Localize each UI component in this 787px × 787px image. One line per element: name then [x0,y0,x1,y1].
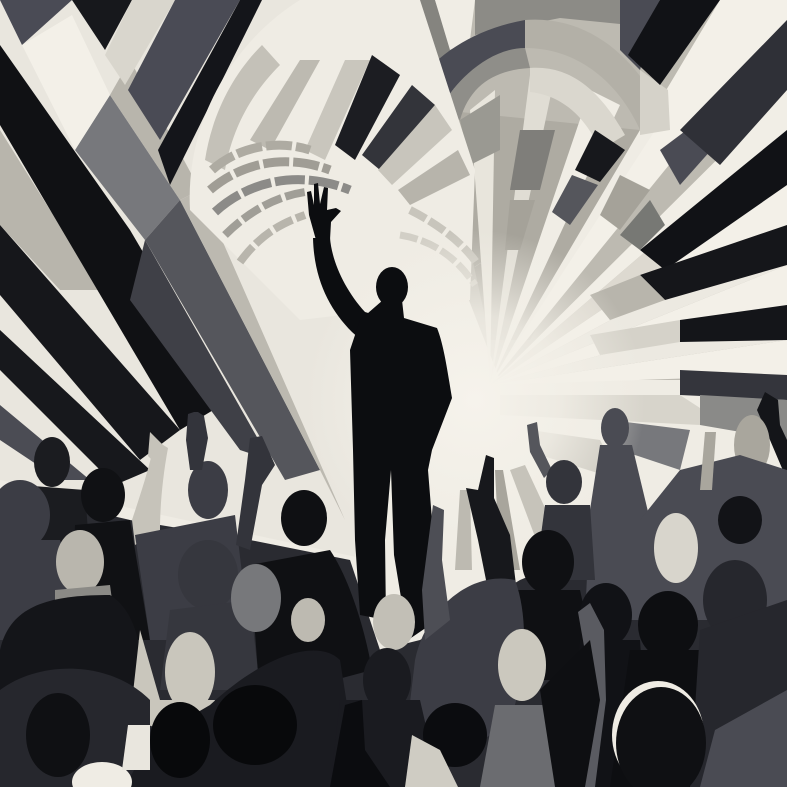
person: dark head right [718,496,762,544]
person: cream head lower centre [480,629,575,787]
person: far left head [0,437,90,560]
person: head dark right 2 [610,591,730,787]
speaker: head [376,267,408,307]
person: second from left [70,468,150,640]
crowd base left [0,470,787,787]
person: centre lower blue-grey mass [400,578,524,787]
person: grey shoulder lower right [700,690,787,787]
person: left dark figure [0,480,90,640]
person: hooded centre left [135,461,250,640]
hand and arm: raised centre [236,436,275,550]
person: right edge figures [690,560,787,787]
person: black oval head [213,685,297,765]
hand and arm: small raised right [527,422,552,478]
person: cream head [130,630,215,740]
person: dark centre head [330,648,440,787]
panel: right lower rays [500,370,787,480]
person: white hair head lower right [612,681,706,787]
speaker: raised arm [313,238,385,350]
person: cream bottom centre [405,735,458,787]
person: foreground centre dark shoulders [125,650,360,787]
hand: raised left [148,432,166,466]
person: pale head centre [291,598,325,642]
person: black dark lower centre [423,703,487,767]
panel: upper-right dome ring [345,0,787,355]
person: large dark shoulder left [0,595,141,720]
panel: upper-right fan base [370,0,787,385]
person: tall hooded figure [585,408,650,620]
person: centre head and shoulders [250,490,372,700]
arm: small grey raised near speaker [422,505,450,640]
person: grey head centre [231,564,281,632]
panel: crowd right [330,392,787,787]
person: foreground head left [26,693,90,777]
person: mid-grey head [160,540,260,690]
hand and arm: large raised centre [466,455,516,600]
glow behind speaker [300,225,650,575]
person: pale head right [654,513,698,583]
person: head dark right [570,583,650,787]
person: pale head left [55,530,112,600]
person: foreground head dark [150,702,210,778]
strip: cream bottom-left [122,725,150,770]
person: foreground dark mass left [0,669,150,787]
panel: lower centre rays [455,465,560,570]
speaker: torso and legs [350,300,452,640]
person: head beside hooded figure [535,460,595,580]
person: pale head far right [734,415,770,475]
person: black bottom centre [330,700,390,787]
hand: raised dark left [186,412,208,470]
figure: speaker silhouette [307,183,452,640]
panel: upper-left diagonal bands [0,0,370,560]
arm: grey raised [700,432,716,490]
person: pale head near speaker [373,594,415,650]
panel: crowd left [0,412,787,787]
hand and arm: upper far right [757,392,787,480]
hand and arm: lower right raised [578,603,606,787]
person: small cream head bottom [72,762,132,787]
person: black head centre right [500,530,600,680]
person: black mass lower centre right [540,640,600,787]
person: dark group right [640,455,787,620]
person: raised arm left [132,440,168,545]
speaker: hand [307,183,341,240]
panel: central swirl arches [190,0,478,320]
